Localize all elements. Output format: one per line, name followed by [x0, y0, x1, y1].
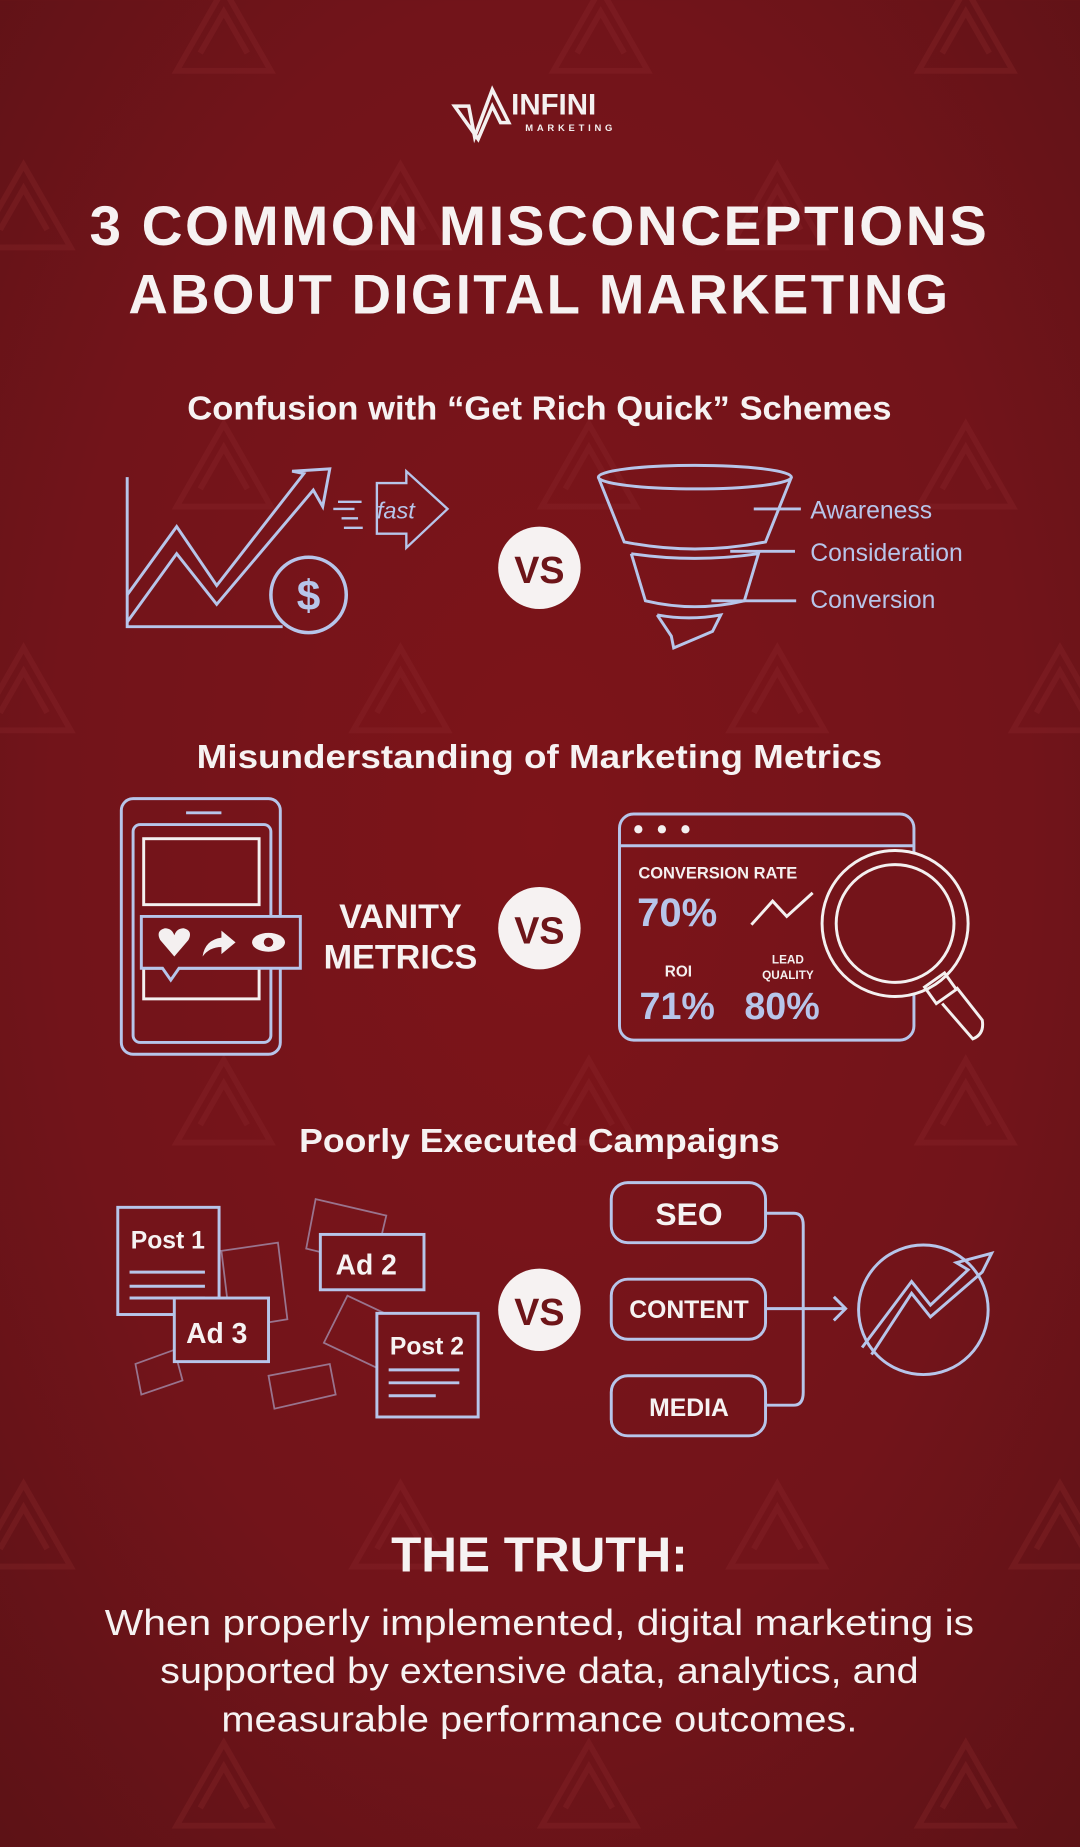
- text: Awareness: [810, 497, 932, 524]
- dashboard with real metrics: QUALITY: [762, 969, 814, 982]
- scattered posts and ads: [118, 1199, 478, 1417]
- dashboard with real metrics: LEAD: [772, 954, 804, 967]
- dashboard with real metrics: 80%: [744, 985, 820, 1027]
- vs badge 2: VS: [514, 910, 565, 952]
- text: Conversion: [810, 587, 935, 614]
- title: [90, 195, 989, 325]
- vanity metrics label: VANITY: [339, 898, 462, 936]
- text: $: [297, 572, 320, 619]
- vanity metrics label: METRICS: [324, 938, 477, 976]
- title: 3 COMMON MISCONCEPTIONS: [90, 195, 989, 257]
- scattered posts and ads: Post 1: [131, 1228, 205, 1255]
- text: Consideration: [810, 540, 963, 567]
- vs badge 3: VS: [514, 1291, 565, 1333]
- dashboard with real metrics: 70%: [637, 891, 717, 935]
- integrated channels: CONTENT: [629, 1297, 749, 1324]
- icon: fast growth chart with dollar: [127, 469, 448, 633]
- heading: get rich quick: Confusion with “Get Rich Quick” Schemes: [187, 389, 892, 426]
- dashboard with real metrics: ROI: [665, 963, 692, 980]
- truth body text: [105, 1602, 974, 1739]
- vs badge 1: [498, 527, 581, 609]
- logo: MARKETING: [525, 122, 616, 133]
- icon: growth circle: [859, 1245, 992, 1375]
- title: ABOUT DIGITAL MARKETING: [128, 263, 950, 325]
- dashboard with real metrics: 71%: [640, 985, 715, 1027]
- text: fast: [377, 497, 416, 523]
- truth body text: supported by extensive data, analytics, and: [160, 1650, 919, 1691]
- scattered posts and ads: Post 2: [390, 1334, 464, 1361]
- vanity metrics label: [324, 898, 477, 976]
- integrated channels: [611, 1183, 846, 1436]
- scattered posts and ads: Ad 2: [336, 1248, 397, 1280]
- icon: magnifying glass: [822, 850, 983, 1039]
- integrated channels: MEDIA: [649, 1395, 729, 1422]
- heading: campaigns: Poorly Executed Campaigns: [299, 1122, 780, 1159]
- dashboard with real metrics: [619, 814, 914, 1040]
- icon: phone with social reactions: [121, 799, 300, 1054]
- truth body text: When properly implemented, digital marketing is: [105, 1602, 974, 1643]
- logo: [455, 88, 616, 139]
- scattered posts and ads: Ad 3: [186, 1317, 247, 1349]
- truth body text: measurable performance outcomes.: [221, 1698, 857, 1739]
- funnel: [598, 465, 801, 648]
- heading: metrics: Misunderstanding of Marketing Metrics: [197, 738, 882, 775]
- dashboard with real metrics: CONVERSION RATE: [638, 865, 797, 883]
- the truth heading: THE TRUTH:: [391, 1527, 688, 1582]
- vs badge 1: VS: [514, 549, 565, 591]
- logo: INFINI: [511, 88, 596, 121]
- vs badge 2: [498, 887, 581, 969]
- integrated channels: SEO: [655, 1196, 723, 1232]
- vs badge 3: [498, 1269, 581, 1351]
